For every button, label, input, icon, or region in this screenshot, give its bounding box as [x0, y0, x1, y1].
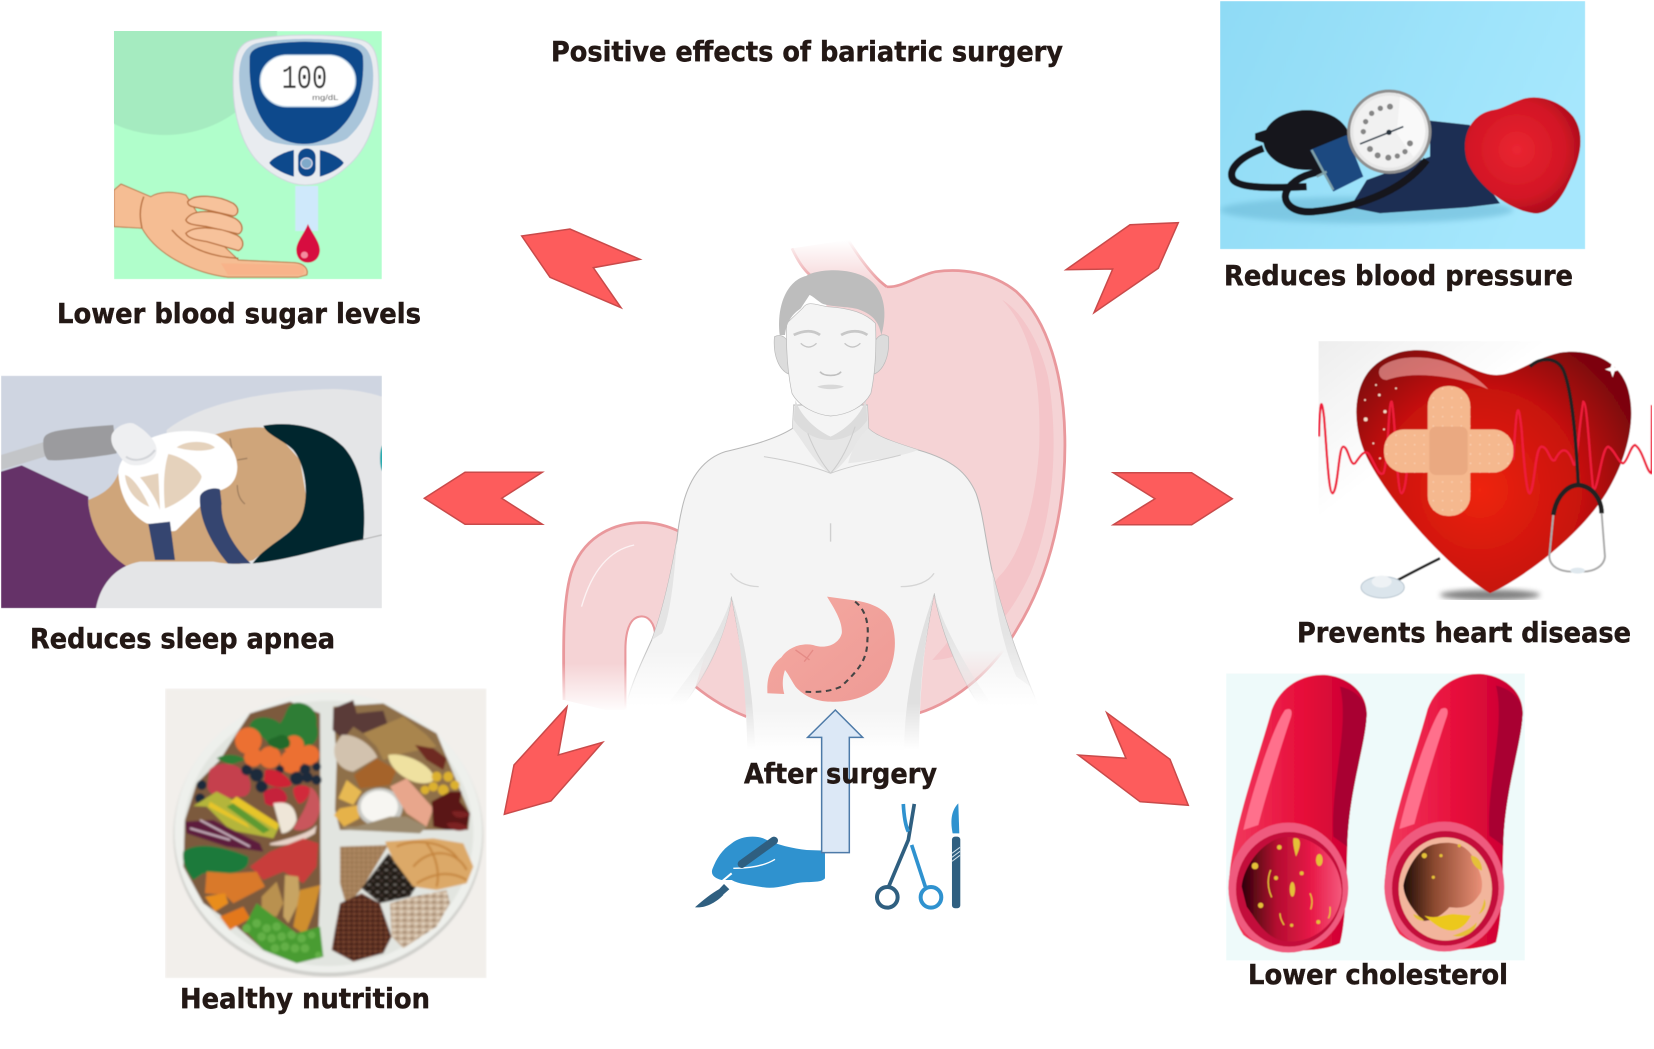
illustration: plate of healthy food — [165, 688, 487, 978]
large background stomach — [564, 240, 1065, 717]
human figure — [622, 270, 1044, 752]
icon: gloved hand holding scalpel — [695, 837, 825, 907]
panel: lower cholesterol — [1226, 673, 1525, 991]
panel: reduces blood pressure — [1220, 1, 1585, 292]
arrow: surgery up to stomach — [808, 710, 863, 853]
arrow: to cholesterol — [1078, 713, 1188, 805]
arrow: to healthy nutrition — [504, 707, 603, 814]
caption: Lower cholesterol — [1248, 959, 1508, 991]
arrow: up to lower blood sugar — [522, 229, 640, 308]
caption: Reduces blood pressure — [1224, 260, 1573, 292]
illustration: sleeper wearing CPAP mask — [1, 376, 387, 608]
panel: reduces sleep apnea — [1, 376, 387, 655]
illustration: bandaged heart with stethoscope — [1318, 341, 1652, 600]
panel: prevents heart disease — [1297, 341, 1652, 649]
caption: Prevents heart disease — [1297, 617, 1631, 649]
illustration: clean and clogged arteries — [1226, 673, 1525, 961]
caption: Healthy nutrition — [180, 983, 430, 1015]
icon: surgical scissors and scalpel — [877, 803, 960, 908]
illustration: glucose meter and finger prick: mg/dL — [312, 93, 338, 102]
illustration: glucose meter and finger prick — [114, 31, 382, 280]
arrow: to sleep apnea — [424, 472, 542, 524]
arrow: to heart disease — [1113, 473, 1232, 525]
panel: healthy nutrition — [165, 688, 487, 1015]
panel: lower blood sugar levels — [59, 31, 420, 330]
illustration: blood pressure cuff and red heart — [1220, 1, 1585, 249]
title: Positive effects of bariatric surgery — [551, 36, 1063, 68]
central illustration: body with stomach — [564, 240, 1065, 752]
illustration: glucose meter and finger prick: 100 — [282, 62, 327, 99]
caption: Reduces sleep apnea — [30, 623, 335, 655]
small stomach with sleeve line — [767, 597, 895, 702]
caption: Lower blood sugar levels — [57, 298, 421, 330]
arrow: to blood pressure — [1066, 223, 1178, 313]
surgery tools and upward arrow — [695, 710, 960, 908]
label: after surgery: After surgery — [744, 758, 937, 790]
